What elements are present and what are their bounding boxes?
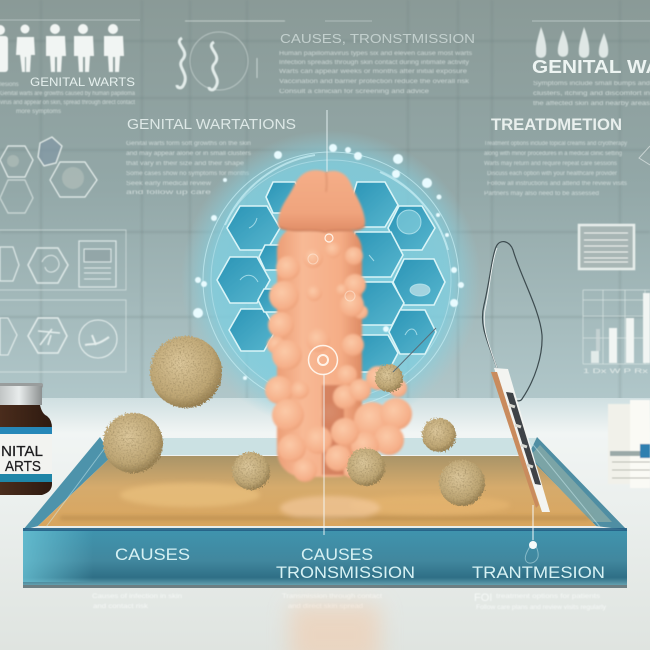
hexagon details [240, 210, 430, 335]
text block: faint reflections under tray [92, 592, 606, 611]
label: causes transmission: TRONSMISSION [276, 564, 415, 582]
sand patches [60, 483, 590, 520]
icon: droplet markers [536, 27, 608, 58]
background wall [0, 0, 650, 420]
icon: bent probe instrument [482, 242, 550, 512]
text block: causes: Warts can appear weeks or months after initial exposure [279, 69, 468, 75]
label: bottle text: ARTS [5, 459, 41, 475]
panel: causes and transmission text [279, 21, 475, 95]
text block: intro: lesions [0, 82, 19, 88]
text block: causes [279, 51, 472, 95]
icon: dna strands in circle [177, 21, 285, 90]
text block: description: Genital warts form soft growths on the skin [126, 141, 251, 147]
panel: genital warts information [126, 116, 296, 196]
text block: causes: Human papillomavirus types six and eleven cause most warts [279, 51, 472, 57]
panel: right screen icon [579, 225, 634, 269]
heading: causes transmission: CAUSES, TRONSTMISSION [280, 32, 475, 46]
icon: right medicine box [608, 400, 650, 488]
hexagons [217, 182, 445, 372]
icon: people row [0, 24, 124, 72]
text block: intro [0, 82, 136, 115]
text block: intro: more symptoms [16, 109, 61, 115]
label: bottle text [1, 444, 43, 475]
pointer line top [326, 110, 328, 172]
text block: treatment: Warts may return and require repeat care sessions [484, 161, 617, 167]
back edge [104, 436, 537, 438]
glowing dots [193, 144, 464, 380]
marker dot [529, 541, 537, 549]
text block: treatment: Discuss each option with your healthcare provider [487, 171, 617, 177]
text block: causes: Consult a clinician for screening and advice [279, 89, 430, 95]
text block: treatment: along with minor procedures in a medical clinic setting [484, 151, 622, 157]
floor [0, 398, 650, 650]
text block: description: Some cases show no symptoms for months [126, 171, 249, 177]
icon: droplet outline [525, 541, 538, 563]
chart: hexagon circle hologram [193, 144, 464, 408]
panel: top left people and heading [0, 20, 140, 115]
panel: top right heading [532, 21, 650, 107]
head [278, 170, 365, 231]
text block: right intro: clusters, itching and discomfort in [533, 91, 650, 97]
anatomical model: lesion-covered specimen [265, 170, 412, 535]
side glass [23, 437, 112, 530]
text block: causes: Vaccination and barrier protection reduce the overall risk [279, 79, 470, 85]
front face [23, 530, 627, 586]
icon: small triangle [639, 146, 650, 165]
text block: right intro: the affected skin and nearby areas [533, 101, 650, 107]
panel: treatment [484, 115, 650, 197]
panel: icon box one [0, 230, 126, 290]
chart: right bar chart: 1 Dx W P Rx [583, 369, 648, 375]
chart: right bar chart [583, 290, 650, 375]
text block: intro: virus and appear on skin, spread through direct contact [0, 100, 135, 106]
text block: intro: Genital warts are growths caused by human papilloma [0, 91, 136, 97]
label: causes: CAUSES [115, 546, 190, 564]
heading: genital wartations: GENITAL WARTATIONS [127, 116, 296, 133]
panel: left hexagon icons [0, 137, 97, 213]
text block: faint reflections under tray: Transmission through contact [282, 594, 382, 600]
pointer needle [393, 328, 436, 372]
text block: faint reflections under tray: FOI [474, 592, 492, 604]
text block: faint reflections under tray: Causes of infection in skin [92, 594, 182, 600]
wart particles [103, 336, 485, 506]
rings [203, 152, 459, 408]
label: causes transmission [276, 546, 415, 582]
text block: faint reflections under tray: and direct skin spread [288, 604, 363, 610]
tray highlights [46, 441, 600, 527]
glow: central hologram [181, 130, 481, 430]
sand surface [38, 456, 596, 526]
text block: description: Seek early medical review [126, 181, 212, 187]
text block: description [126, 141, 251, 196]
body and bumps [265, 170, 412, 482]
text block: faint reflections under tray: Follow care plans and review visits regularly [476, 605, 606, 611]
panel: icon box two [0, 300, 126, 372]
text block: description: and may appear alone or in small clusters [126, 151, 251, 157]
text block: right intro [533, 81, 650, 107]
label: causes transmission: CAUSES [301, 546, 373, 564]
label: bottle text: NITAL [1, 444, 43, 460]
front labels [115, 541, 605, 582]
label: treatment: TRANTMESION [472, 564, 605, 582]
text block: treatment: Follow all instructions and attend the review visits [487, 181, 627, 187]
heading: treatment: TREATDMETION [491, 115, 622, 134]
text block: description: that vary in their size and their shape [126, 161, 245, 167]
text block: treatment: Partners may also need to be assessed [484, 191, 599, 197]
reflection of model [290, 605, 380, 650]
text block: treatment [484, 141, 627, 197]
text block: treatment: Treatment options include topical creams and cryotherapy [484, 141, 627, 147]
text block: description: and follow up care [126, 190, 212, 196]
text block: right intro: Symptoms include small bumps and [533, 81, 650, 87]
text block: faint reflections under tray: and contact risk [93, 604, 149, 610]
heading: genital warts: GENITAL WARTS [30, 75, 135, 89]
text block: faint reflections under tray: treatment options for patients [496, 594, 600, 600]
icon: medicine bottle [0, 383, 52, 495]
text block: causes: Infection spreads through skin contact during intimate activity [279, 60, 469, 66]
tray: glass base [23, 437, 627, 588]
pointer line to tray [532, 505, 534, 540]
target rings [308, 234, 355, 374]
base cluster [304, 366, 412, 471]
